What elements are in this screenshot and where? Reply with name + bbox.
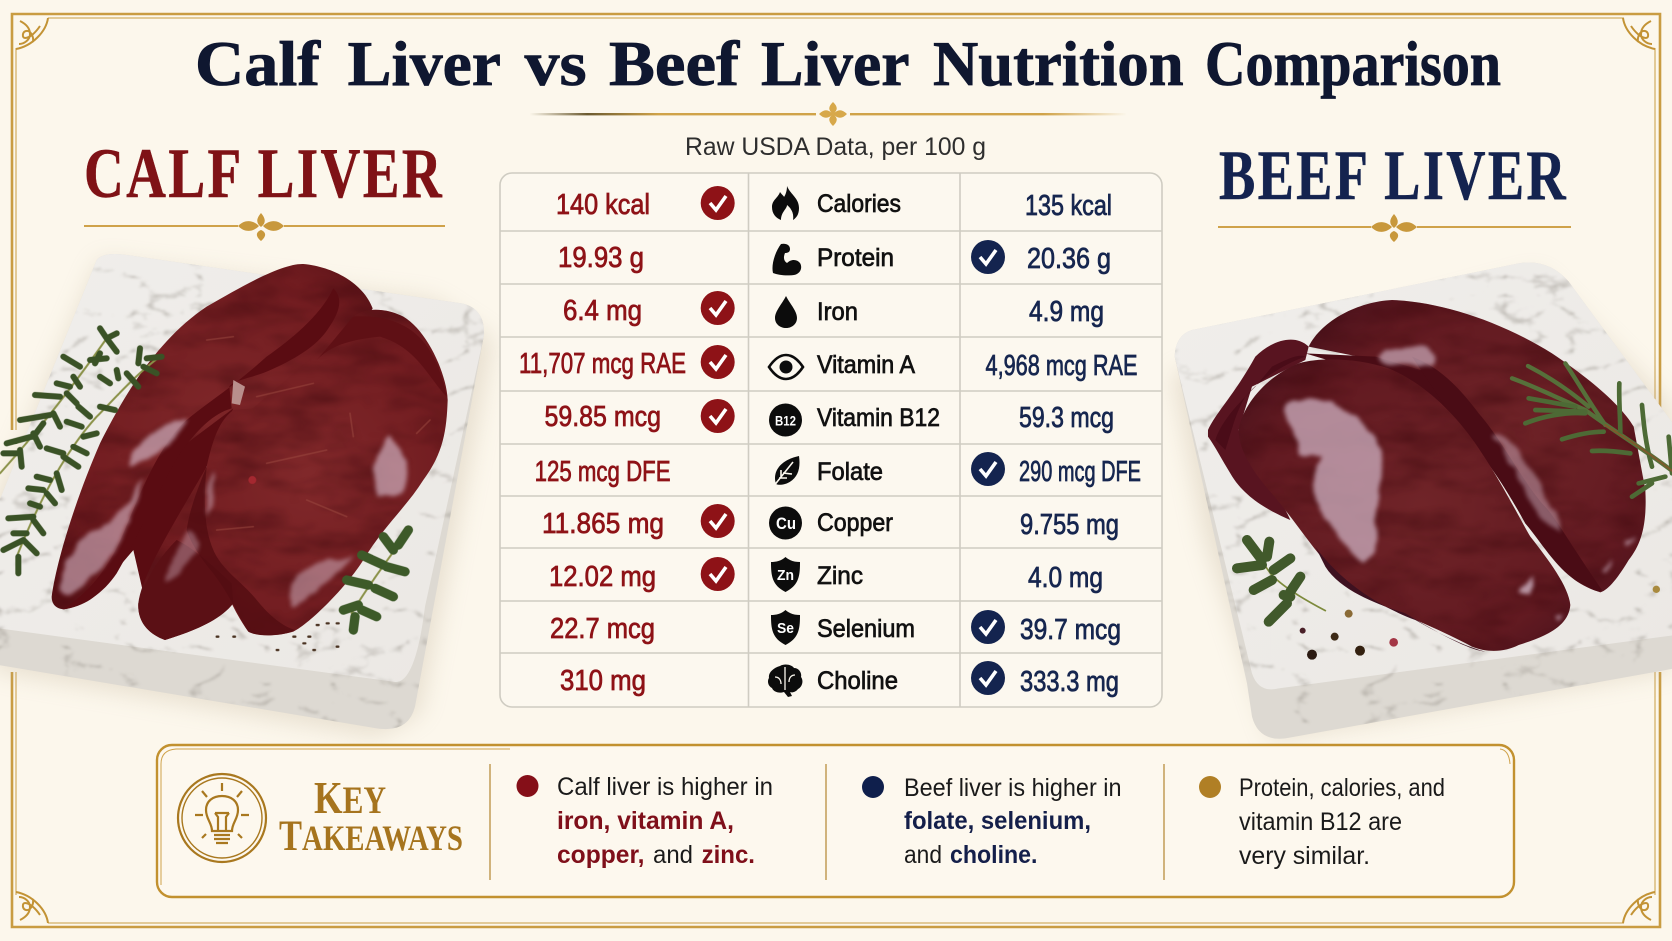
corner ornament: bottom left: [16, 892, 48, 923]
takeaway: calf liver: and: [653, 841, 693, 869]
heading: calf liver: CALF LIVER: [84, 135, 444, 213]
takeaway: calf liver: copper,: [557, 841, 644, 869]
title: vs: [525, 28, 587, 99]
beef liver divider ornament: [1218, 211, 1571, 243]
beef liver values: 333.3 mg: [1020, 666, 1119, 698]
icon: light bulb: [178, 774, 266, 862]
takeaway: similarities: [1199, 774, 1445, 870]
beef liver values: 9.755 mg: [1020, 509, 1119, 541]
nutrient names: Iron: [817, 298, 858, 326]
calf liver values: 22.7 mcg: [550, 613, 655, 645]
photo: calf liver on marble board: [0, 254, 493, 737]
calf liver values: 125 mcg DFE: [535, 456, 671, 488]
nutrient names: Zinc: [817, 562, 863, 590]
takeaway: beef liver: Beef liver is higher in: [904, 774, 1122, 802]
icon: copper badge: Cu: [776, 514, 796, 533]
nutrient names: Folate: [817, 458, 883, 486]
title: Beef: [609, 28, 740, 99]
nutrient names: Vitamin A: [817, 351, 915, 379]
title: Nutrition: [933, 28, 1184, 99]
photo: beef liver on marble board: [1172, 262, 1672, 740]
liver highlights: [58, 420, 408, 605]
front liver lobe: [1239, 359, 1570, 651]
beef liver values: 135 kcal: [1025, 190, 1112, 222]
calf liver values: 6.4 mg: [563, 295, 642, 327]
calf liver values: 11,707 mcg RAE: [519, 348, 686, 380]
takeaway: similarities: vitamin B12 are: [1239, 808, 1402, 836]
takeaway: beef liver: choline.: [950, 841, 1038, 869]
calf liver divider ornament: [84, 210, 445, 242]
beef liver check marks: [971, 240, 1005, 695]
takeaway: calf liver: zinc.: [702, 841, 755, 869]
heading: key takeaways: TAKEAWAYS: [279, 813, 463, 860]
takeaway: beef liver: and: [904, 841, 942, 869]
corner ornament: top left: [16, 18, 48, 49]
icon: vitamin B12 badge: B12: [775, 412, 796, 428]
nutrition comparison table: [500, 173, 1162, 707]
back liver lobe: [52, 264, 373, 609]
icon: choline brain: [768, 665, 802, 697]
icon: folate leaf: [773, 456, 799, 487]
panel: key takeaways: [157, 745, 1514, 897]
takeaways box: [157, 745, 1514, 897]
corner ornament: top right: [1623, 18, 1655, 49]
takeaway: similarities: very similar.: [1239, 842, 1370, 870]
takeaway: similarities: Protein, calories, and: [1239, 774, 1445, 802]
calf liver check marks: [701, 186, 735, 591]
nutrient icons: [768, 186, 803, 697]
takeaway: beef liver: folate, selenium,: [904, 807, 1091, 835]
back liver lobe: [1309, 300, 1646, 592]
calf liver values: 11.865 mg: [542, 508, 664, 540]
icon: copper badge: [769, 506, 802, 540]
icon: vitamin A eye: [769, 355, 803, 379]
nutrient names: [817, 190, 940, 695]
icon: zinc shield: [771, 557, 800, 592]
heading: beef liver: BEEF LIVER: [1219, 137, 1568, 215]
beef liver values: 4.9 mg: [1029, 296, 1104, 328]
beef liver values: 290 mcg DFE: [1019, 456, 1141, 488]
corner ornament: bottom right: [1623, 892, 1655, 923]
beef liver values: 20.36 g: [1027, 243, 1111, 275]
spice specks: [217, 623, 339, 650]
title: Calf: [195, 28, 321, 99]
marble board: [0, 254, 484, 729]
subtitle: Raw USDA Data, per 100 g: [685, 133, 986, 161]
takeaway: calf liver: Calf liver is higher in: [557, 773, 773, 801]
icon: selenium shield: Se: [777, 620, 794, 637]
takeaway: calf liver: [516, 773, 773, 869]
beef liver values: 4.0 mg: [1028, 562, 1103, 594]
beef liver values: 39.7 mcg: [1020, 614, 1121, 646]
marble board: [1175, 262, 1672, 739]
heading: key takeaways: KEY: [314, 772, 386, 823]
calf liver values: 310 mg: [560, 665, 646, 697]
icon: zinc shield: Zn: [777, 567, 794, 584]
marbled liver sheen: [207, 337, 430, 530]
liver highlights: [1284, 346, 1635, 622]
calf liver values: [519, 189, 686, 697]
title: Liver: [348, 28, 501, 99]
title: Liver: [761, 28, 910, 99]
calf liver values: 12.02 mg: [549, 561, 656, 593]
nutrient names: Copper: [817, 509, 893, 537]
small side liver lobe: [1208, 340, 1309, 520]
title: [195, 28, 1501, 99]
calf liver values: 19.93 g: [558, 242, 644, 274]
icon: iron drop: [775, 296, 797, 328]
takeaway: calf liver: iron, vitamin A,: [557, 807, 734, 835]
rosemary and thyme sprigs: [1237, 363, 1672, 622]
nutrient names: Calories: [817, 190, 901, 218]
nutrient names: Protein: [817, 244, 894, 272]
title divider ornament: [530, 102, 1126, 126]
icon: selenium shield: [771, 610, 800, 645]
calf liver values: 140 kcal: [556, 189, 650, 221]
peppercorns: [1300, 586, 1660, 660]
beef liver values: [986, 190, 1141, 698]
icon: vitamin B12 badge: [769, 404, 802, 436]
nutrient names: Selenium: [817, 615, 915, 643]
beef liver values: 4,968 mcg RAE: [986, 350, 1138, 382]
heading: key takeaways: [279, 772, 463, 860]
beef liver values: 59.3 mcg: [1019, 402, 1114, 434]
calf liver values: 59.85 mcg: [544, 401, 661, 433]
icon: calories flame: [772, 186, 799, 220]
front liver lobe: [138, 310, 448, 640]
icon: protein muscle arm: [772, 244, 801, 275]
nutrient names: Choline: [817, 667, 898, 695]
nutrient names: Vitamin B12: [817, 404, 940, 432]
takeaway: beef liver: [862, 774, 1122, 869]
title: Comparison: [1205, 28, 1501, 99]
thyme sprigs: [0, 328, 408, 630]
table grid: [500, 173, 1162, 707]
